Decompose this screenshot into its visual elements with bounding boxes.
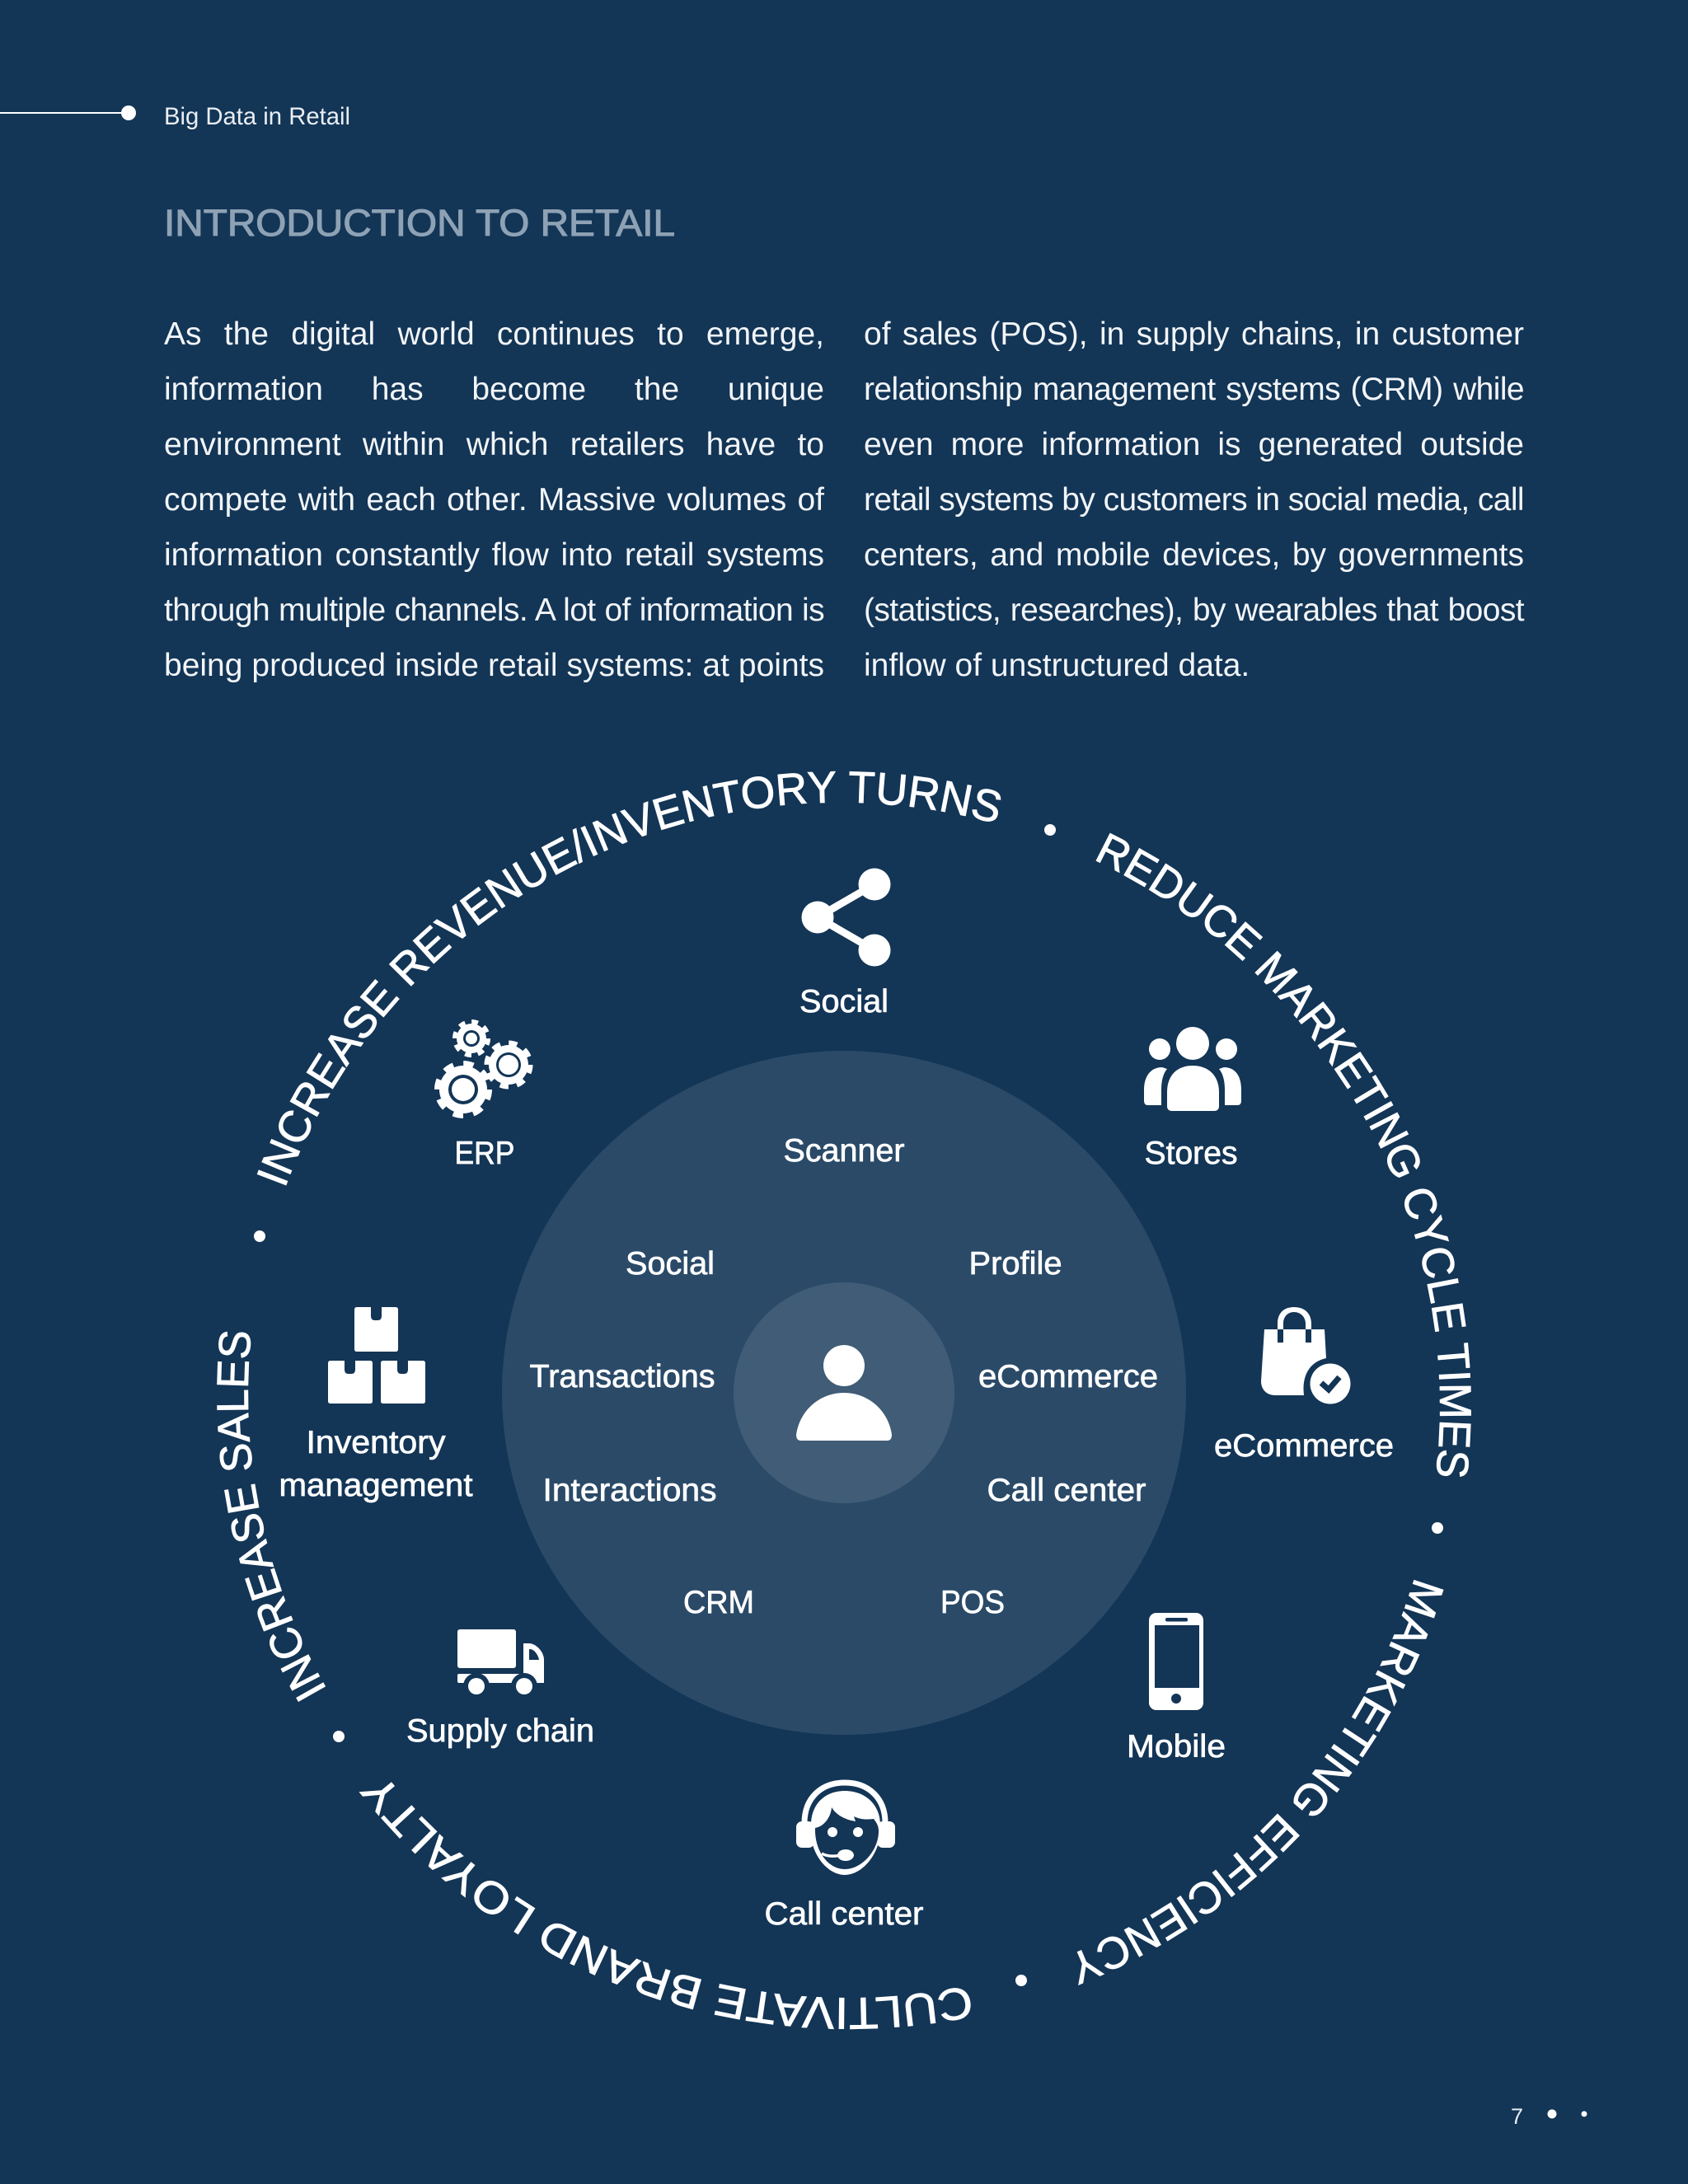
label: eCommerce: eCommerce [1214,1428,1394,1464]
page number and dots: 7 [1511,2104,1523,2129]
label: Stores: Stores [1144,1136,1238,1171]
body text: right column: retail systems by customers in social media, call [864,482,1524,518]
inner data circle [502,1051,1186,1735]
running header: Big Data in Retail [164,103,350,130]
running header: INTRODUCTION TO RETAIL [164,202,675,244]
icon: stores people [1144,1027,1241,1111]
inner circle labels: Call center [987,1473,1146,1508]
body text: right column: of sales (POS), in supply chains, in customer [864,316,1524,352]
inner circle labels: Social [626,1246,715,1282]
body text: right column: even more information is generated outside [864,427,1524,462]
body text: left column: As the digital world continues to emerge, [164,316,824,352]
label: Mobile: Mobile [1127,1729,1226,1765]
label: Call center: Call center [765,1896,924,1932]
body text: left column: information has become the unique [164,372,824,407]
inner circle labels: Interactions [542,1473,717,1508]
inner circle labels: POS [940,1585,1005,1620]
inner circle labels: eCommerce [978,1359,1158,1394]
label: Inventory management: Inventory [307,1425,446,1460]
label: Social: Social [799,984,889,1019]
inner circle labels: Transactions [529,1359,715,1394]
body text: left column: compete with each other. Massive volumes of [164,482,824,518]
body text: left column: information constantly flow into retail systems [164,537,824,573]
label: Inventory management [279,1425,473,1503]
body text: right column: relationship management systems (CRM) while [864,372,1524,407]
curved goals ring: INCREASE SALES [217,1332,326,1702]
running header [0,103,675,244]
inner circle labels: Profile [969,1246,1062,1282]
curved goals ring: CULTIVATE BRAND LOYALTY [359,1782,971,2029]
icon: ERP gears [438,1023,529,1114]
icon: eCommerce bag [1261,1307,1350,1404]
icon: mobile phone [1149,1613,1203,1710]
body text: right column: centers, and mobile devices, by governments [864,537,1524,573]
icon: customer [796,1345,892,1441]
page number and dots [1511,2104,1587,2129]
icon: call center agent [796,1783,895,1875]
body text: left column: being produced inside retail systems: at points [164,648,824,683]
body text: left column [164,316,824,683]
body text: right column: inflow of unstructured data. [864,648,1250,683]
inner circle labels [529,1133,1158,1620]
body text: right column: (statistics, researches), by wearables that boost [864,593,1524,628]
centre circle [734,1282,954,1503]
inner circle labels: CRM [683,1585,754,1620]
body text: left column: environment within which retailers have to [164,427,824,462]
inner circle labels: Scanner [783,1133,905,1169]
icon: inventory boxes [328,1307,425,1404]
label: ERP: ERP [455,1136,514,1171]
body text: right column [864,316,1525,683]
label: Inventory management: management [279,1468,473,1503]
curved goals ring [217,771,1471,2029]
curved goals ring: INCREASE REVENUE/INVENTORY TURNS [257,771,1001,1185]
body text: left column: through multiple channels. A lot of information is [164,593,824,628]
curved goals ring: REDUCE MARKETING CYCLE TIMES [1096,832,1471,1477]
icon: social share [801,869,890,966]
curved goals ring: MARKETING EFFICIENCY [1076,1579,1444,1985]
label: Supply chain: Supply chain [406,1713,594,1749]
icon: supply chain truck [457,1629,544,1699]
